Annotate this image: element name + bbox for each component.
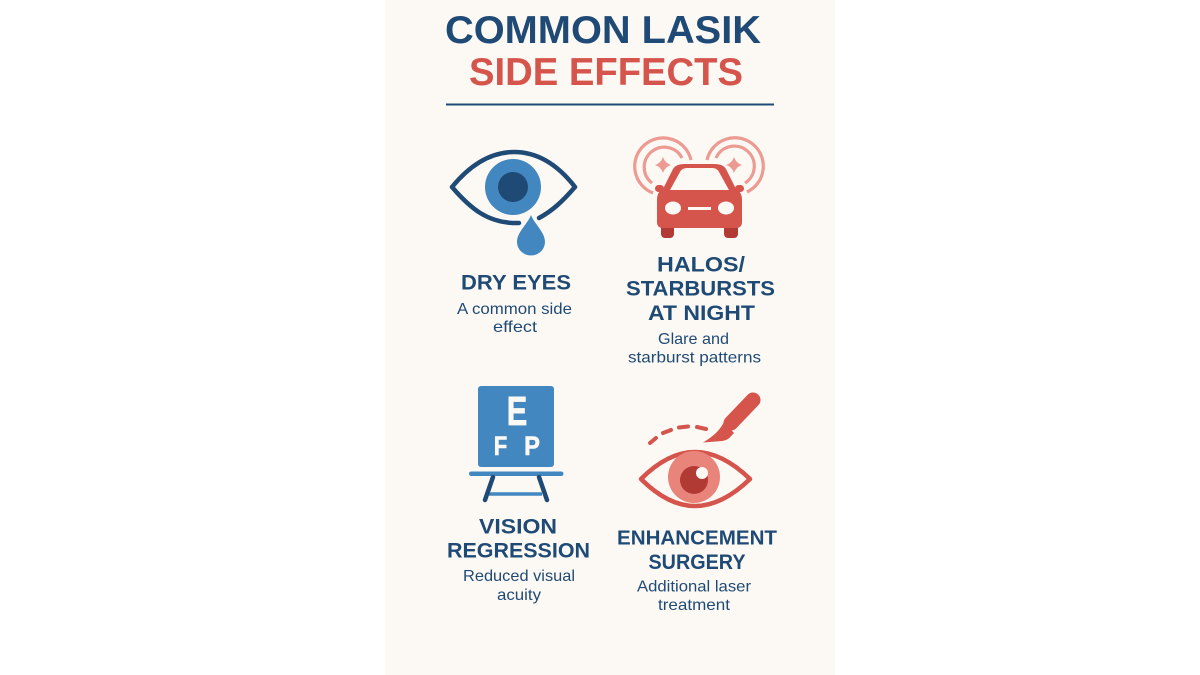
description: dry eyes: [457, 301, 572, 336]
heading: halos/starbursts at night: [626, 252, 775, 325]
description: halos: [628, 331, 761, 366]
description: vision regression: acuity: [497, 587, 541, 604]
description: enhancement surgery: [637, 578, 752, 614]
icon: eye with scalpel: [641, 400, 753, 506]
heading: vision regression: REGRESSION: [447, 538, 590, 562]
icon: eye chart on easel: F: [494, 432, 507, 462]
description: enhancement surgery: Additional laser: [637, 578, 752, 596]
description: dry eyes: A common side: [457, 301, 572, 318]
title: SIDE EFFECTS: [469, 51, 743, 94]
icon: car with halos: [635, 138, 763, 238]
heading: vision regression: VISION: [479, 514, 557, 538]
title: COMMON LASIK: [445, 9, 761, 52]
description: vision regression: Reduced visual: [463, 568, 575, 585]
heading: halos/starbursts at night: STARBURSTS: [626, 276, 775, 300]
icon: eye chart on easel: E: [507, 388, 527, 434]
title: [445, 9, 761, 94]
panel: dry eyes: [452, 152, 575, 336]
heading: halos/starbursts at night: AT NIGHT: [648, 301, 755, 325]
icon: eye chart on easel: [469, 386, 564, 500]
heading: enhancement surgery: ENHANCEMENT: [617, 526, 777, 550]
description: halos: starburst patterns: [628, 350, 761, 366]
heading: enhancement surgery: SURGERY: [648, 551, 746, 574]
icon: eye with tear drop: [452, 152, 575, 256]
panel: enhancement surgery: [617, 400, 777, 614]
heading: halos/starbursts at night: HALOS/: [657, 252, 745, 276]
panel: halos and starbursts: [626, 138, 775, 366]
description: vision regression: [463, 568, 575, 604]
heading: enhancement surgery: [617, 526, 777, 574]
description: dry eyes: effect: [493, 319, 538, 336]
heading: dry eyes: DRY EYES: [461, 270, 571, 294]
description: enhancement surgery: treatment: [658, 597, 731, 614]
panel: vision regression: [447, 386, 590, 604]
panel: background: [385, 0, 835, 675]
heading: vision regression: [447, 514, 590, 562]
description: halos: Glare and: [658, 331, 729, 348]
icon: eye chart on easel: P: [524, 432, 540, 461]
